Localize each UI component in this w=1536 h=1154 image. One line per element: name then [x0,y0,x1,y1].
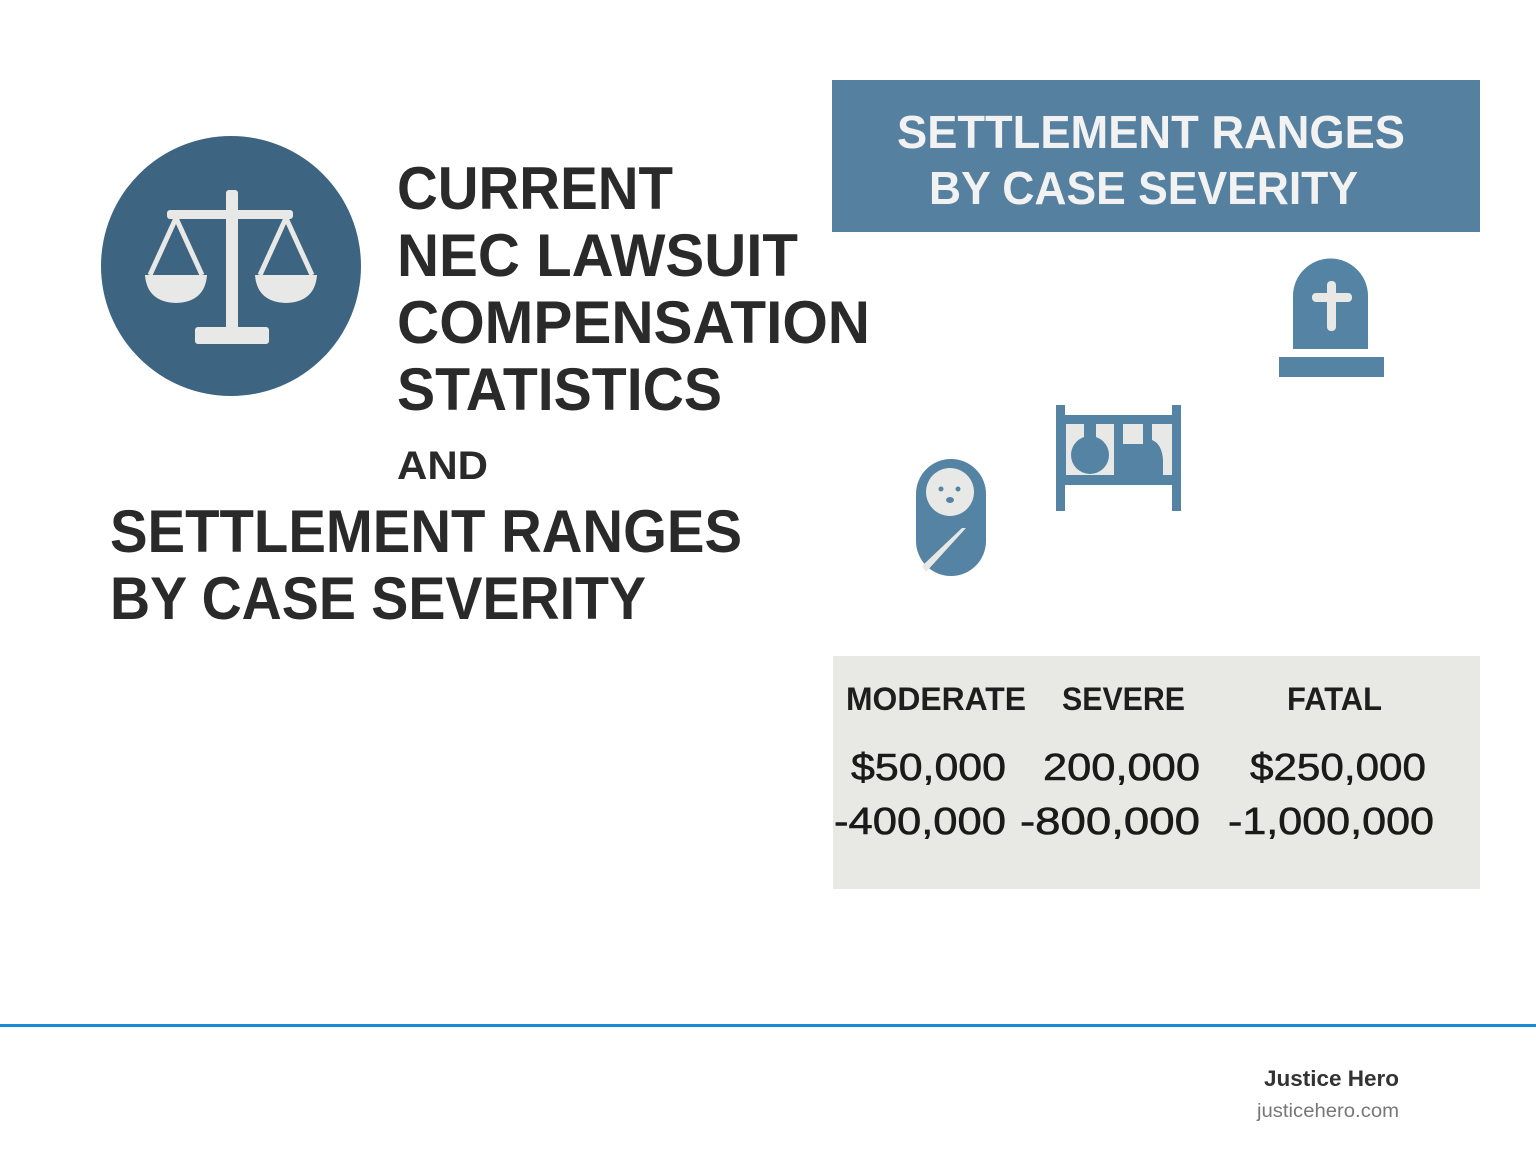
ranges: $250,000 [1250,747,1426,789]
ranges: -800,000 [1020,801,1200,843]
icon: swaddled baby [916,459,986,576]
footer brand [1256,1066,1399,1122]
column headers [846,681,1382,717]
ranges: $50,000 [851,747,1006,789]
footer brand: Justice Hero [1264,1066,1399,1091]
column headers: MODERATE [846,681,1026,717]
title: STATISTICS [397,356,722,423]
panel: settlement table [833,656,1480,889]
title: COMPENSATION [397,289,870,356]
title [110,155,870,632]
ranges: -1,000,000 [1228,801,1434,843]
footer brand: justicehero.com [1256,1101,1399,1122]
icon: crib [1056,405,1181,511]
icon: tombstone [1279,258,1384,377]
title: AND [397,444,488,488]
ranges: 200,000 [1043,747,1200,789]
ranges [834,747,1434,843]
ranges: -400,000 [834,801,1006,843]
title: NEC LAWSUIT [397,222,798,289]
column headers: SEVERE [1062,681,1185,717]
title: BY CASE SEVERITY [110,565,646,632]
icon: scales of justice [101,136,361,396]
title: SETTLEMENT RANGES [110,498,742,565]
banner: BY CASE SEVERITY [929,162,1358,214]
banner: SETTLEMENT RANGES [897,106,1405,158]
banner [832,80,1480,232]
title: CURRENT [397,155,673,222]
column headers: FATAL [1287,681,1382,717]
